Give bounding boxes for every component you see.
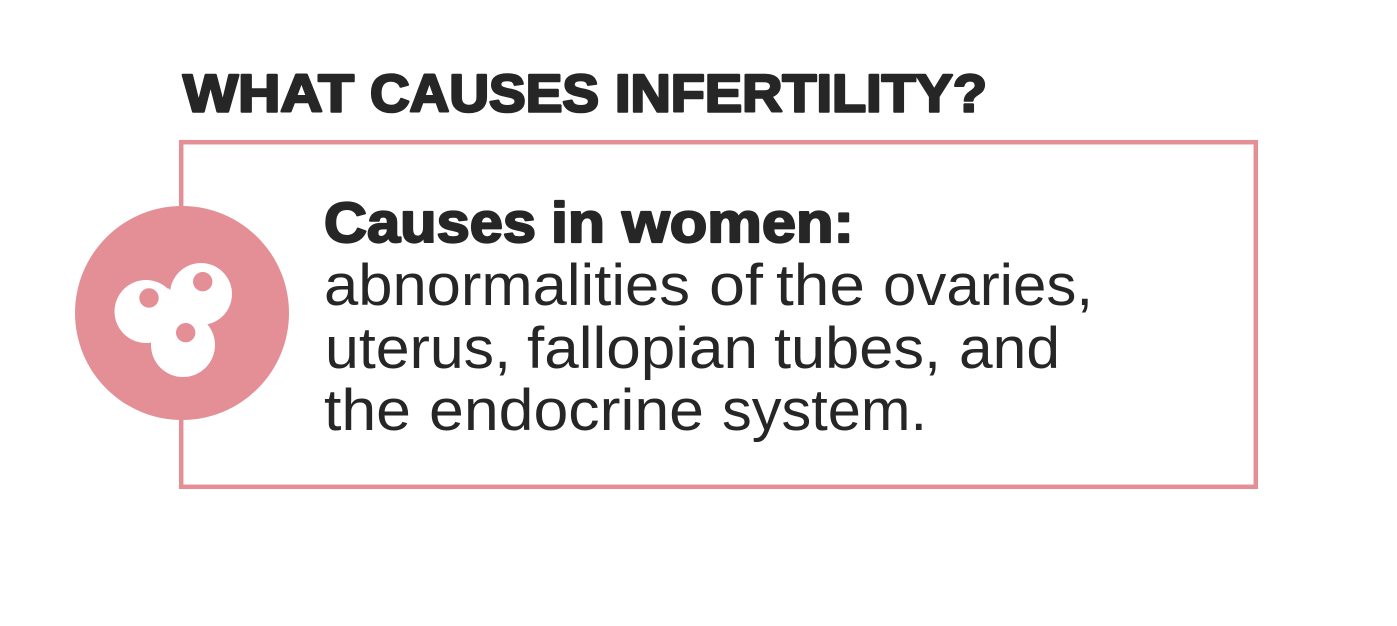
body line 1: the xyxy=(776,253,865,318)
body line 1: abnormalities xyxy=(324,253,690,318)
body line 2: and xyxy=(959,316,1060,381)
body line 1: of xyxy=(709,253,764,318)
title: INFERTILITY? xyxy=(615,64,987,124)
subheading: in xyxy=(551,191,605,255)
body line 1 xyxy=(324,253,1093,318)
icon: cells in circle xyxy=(75,206,289,420)
title: WHAT xyxy=(183,64,354,124)
panel: causes in women xyxy=(181,142,1256,487)
subheading: women: xyxy=(621,191,854,255)
subheading: Causes xyxy=(324,191,536,255)
body line 3: system. xyxy=(722,378,927,443)
body line 3: the xyxy=(324,378,411,443)
title xyxy=(183,64,987,124)
title: CAUSES xyxy=(370,64,599,124)
body line 2 xyxy=(325,316,1060,381)
body line 2: tubes, xyxy=(774,316,941,381)
body line 3: endocrine xyxy=(429,378,704,443)
body line 2: fallopian xyxy=(527,316,758,381)
body line 1: ovaries, xyxy=(883,253,1093,318)
body line 3 xyxy=(324,378,927,443)
body line 2: uterus, xyxy=(325,316,511,381)
subheading xyxy=(324,191,854,255)
text block: causes in women xyxy=(324,191,1093,443)
